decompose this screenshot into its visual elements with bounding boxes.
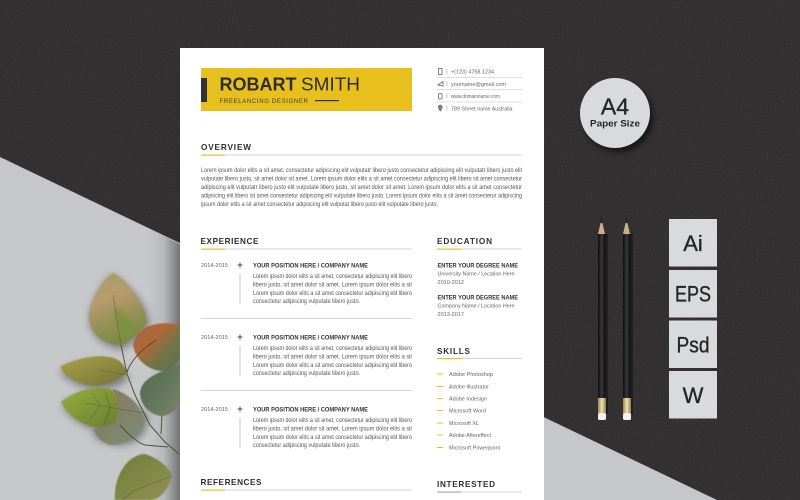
experience entry 3: Lorem ipsum dolor elits a sit amet, consectetur adipiscing elit libero xyxy=(253,418,413,424)
experience entry 3: libero justo, sit amet dolor sit amet. Lorem ipsum dolor elits a sit xyxy=(253,426,412,432)
experience entry 1: consectetur adipiscing vulputate libero justo. xyxy=(253,299,360,305)
experience entry 2: Lorem ipsum dolor elits a sit amet, consectetur adipiscing elit libero xyxy=(253,346,413,352)
resume paper xyxy=(180,48,544,500)
heading: skills: SKILLS xyxy=(437,347,471,356)
overview text: Lorem ipsum dolor elits a sit amet, consectetur adipiscing elit vulputatr libero justo consectetur adipiscing elit vulputatr libero justo elit xyxy=(201,168,522,174)
leaf: grey-green back lower xyxy=(93,389,144,445)
skills list: Adobe Aftereffect xyxy=(449,433,491,439)
education entries: 2010-2012 xyxy=(438,280,464,286)
experience entry 3: 2014-2015 xyxy=(201,407,228,413)
experience entry 2: libero justo, sit amet dolor sit amet. Lorem ipsum dolor elits a sit xyxy=(253,354,412,360)
leaf: bottom xyxy=(115,454,172,500)
experience entry 3 xyxy=(201,406,413,449)
file tile: Ai: Ai xyxy=(683,231,703,256)
education entries: ENTER YOUR DEGREE NAME xyxy=(438,295,518,301)
overview text: ipsum dolor elits a sit amet consectetur adipiscing elit vulputat libero justo elit vulputate libero justo. xyxy=(201,202,438,208)
pencil 2 xyxy=(623,215,633,420)
grey diagonal panel xyxy=(0,157,717,500)
education entries: ENTER YOUR DEGREE NAME xyxy=(438,263,518,269)
experience entry 2: consectetur adipiscing vulputate libero justo. xyxy=(253,371,360,377)
experience entry 1: 2014-2015 xyxy=(201,263,228,269)
file tile: W: W xyxy=(683,383,704,408)
file tile: Ai xyxy=(669,219,717,266)
header name banner: SMITH xyxy=(301,74,360,95)
overview text: adipiscing elit vulputatr libero justo elit vulputate libero justo, sit amet dolor sit amet. Lorem ipsum dolor elits a sit amet consectetur xyxy=(201,185,522,191)
leaf: large top xyxy=(89,273,147,345)
leaf veins xyxy=(85,295,172,500)
skills list: Microsoft Word xyxy=(449,408,486,414)
heading: overview: OVERVIEW xyxy=(201,143,251,152)
contact icons xyxy=(438,68,443,111)
experience entry 2: YOUR POSITION HERE / COMPANY NAME xyxy=(253,335,368,341)
file tile: Psd xyxy=(669,320,717,368)
header name banner: ROBART xyxy=(220,74,297,95)
education entries: Company Name / Location Here xyxy=(438,304,514,310)
contact list: +(123) 4758 1234 xyxy=(451,70,494,76)
skills list: Microsoft XL xyxy=(449,421,479,427)
A4 paper size badge: Paper Size xyxy=(590,118,640,130)
skills list: Adobe Illustrator xyxy=(449,384,489,390)
experience entry 1: YOUR POSITION HERE / COMPANY NAME xyxy=(253,263,368,269)
heading: education: EDUCATION xyxy=(437,237,492,246)
stems xyxy=(120,340,179,454)
overview text: adipiscing elit libero sit amet consectetur adipiscing elit vulputate libero justo. Lorem ipsum dolor elits a sit amet consectetur adipiscing xyxy=(201,193,522,199)
experience entry 1: Lorem ipsum dolor elits a sit amet, consectetur adipiscing elit libero xyxy=(253,274,413,280)
A4 paper size badge: A4 xyxy=(601,94,629,120)
experience entry 2: Lorem ipsum dolor elits a sit amet consectetur adipiscing elit libero xyxy=(253,363,413,369)
contact list: 789 Street name Australia xyxy=(451,106,513,112)
education entries xyxy=(438,263,518,318)
file tile: W xyxy=(669,371,717,418)
heading: interested: INTERESTED xyxy=(437,480,495,489)
skills list: Adobe Indesign xyxy=(449,396,487,402)
file tile: EPS xyxy=(669,270,717,318)
overview text xyxy=(201,168,522,208)
experience entry 2 xyxy=(201,334,413,391)
leaf shadows xyxy=(60,273,149,445)
skills list: Microsoft Powerpoint xyxy=(449,446,500,452)
leaf: grey-green back right xyxy=(140,364,180,416)
experience entry 1 xyxy=(201,262,413,319)
heading: references: REFERENCES xyxy=(200,478,262,487)
heading: skills xyxy=(437,347,522,359)
overview text: vulputate libero justo, sit amet dolor sit amet. Lorem ipsum dolor elits a sit amet consectetur adipiscing elit libero sit amet consectetur xyxy=(201,176,522,182)
header name banner xyxy=(201,68,412,111)
file tile: EPS: EPS xyxy=(675,282,711,306)
leaf: yellow left xyxy=(60,356,127,386)
contact list xyxy=(437,68,522,112)
heading: education xyxy=(437,237,522,250)
heading: interested xyxy=(437,480,522,493)
leaf: orange right xyxy=(133,323,180,371)
contact list: www.domainname.com xyxy=(450,94,500,100)
experience entry 1: Lorem ipsum dolor elits a sit amet consectetur adipiscing elit libero xyxy=(253,291,413,297)
experience entry 2: 2014-2015 xyxy=(201,335,228,341)
leaf: bright green xyxy=(61,388,118,427)
experience entry 1: libero justo, sit amet dolor sit amet. Lorem ipsum dolor elits a sit xyxy=(253,282,412,288)
experience entry 3: Lorem ipsum dolor elits a sit amet consectetur adipiscing elit libero xyxy=(253,435,413,441)
paper shadow on grey panel xyxy=(148,228,180,500)
education entries: University Name / Location Here xyxy=(438,272,514,278)
file tile: Psd: Psd xyxy=(676,332,710,358)
contact list: yourname@gmail.com xyxy=(451,82,506,88)
botanical leaves xyxy=(60,273,180,500)
skills list: Adobe Photoshop xyxy=(449,372,493,378)
leaf: green patch on large leaf xyxy=(115,306,136,344)
skills list xyxy=(437,372,500,452)
education entries: 2013-2017 xyxy=(438,312,464,318)
header name banner: FREELANCING DESIGNER xyxy=(220,99,309,105)
pencil 1 xyxy=(598,215,608,420)
experience entry 3: consectetur adipiscing vulputate libero justo. xyxy=(253,443,360,449)
experience entry 3: YOUR POSITION HERE / COMPANY NAME xyxy=(253,407,368,413)
heading: experience: EXPERIENCE xyxy=(200,237,259,246)
A4 paper size badge xyxy=(580,78,653,152)
